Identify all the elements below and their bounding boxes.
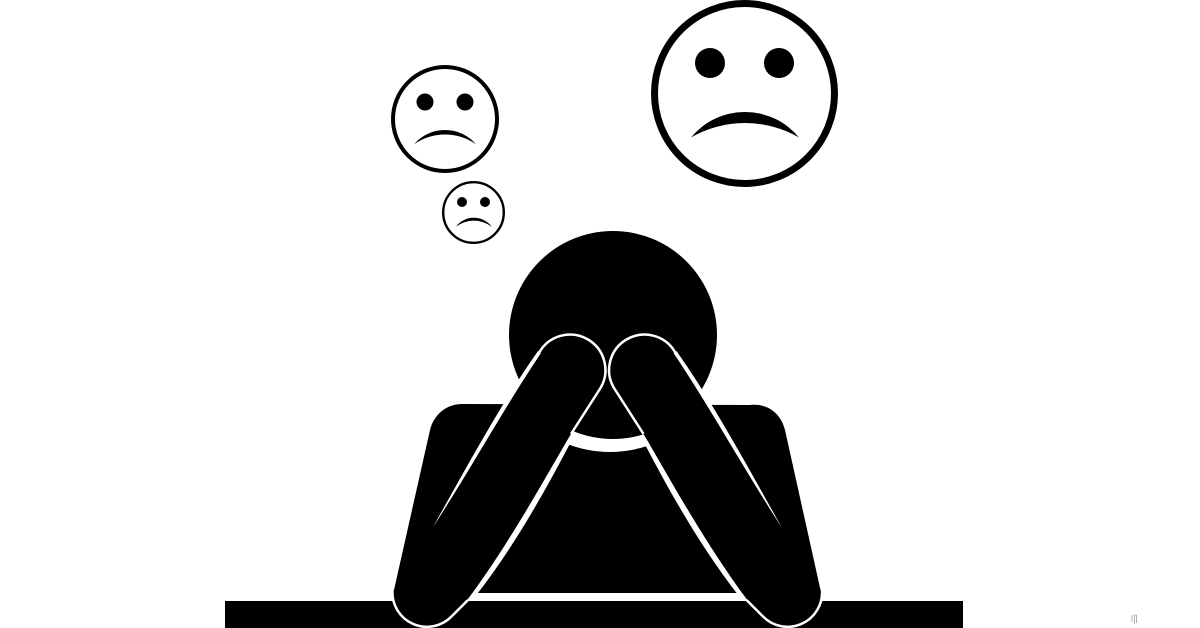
icon: medium frowning face: [393, 67, 497, 171]
head: [509, 231, 717, 439]
icon: small frowning face: [443, 182, 504, 243]
table: [225, 601, 963, 628]
left arm: [392, 335, 605, 627]
figure: person with head in hands: [392, 218, 822, 627]
icon: large frowning face: [654, 4, 834, 184]
watermark mark: [1132, 615, 1136, 624]
neck gap: [493, 218, 727, 452]
right arm: [609, 335, 822, 627]
torso: [394, 404, 820, 593]
